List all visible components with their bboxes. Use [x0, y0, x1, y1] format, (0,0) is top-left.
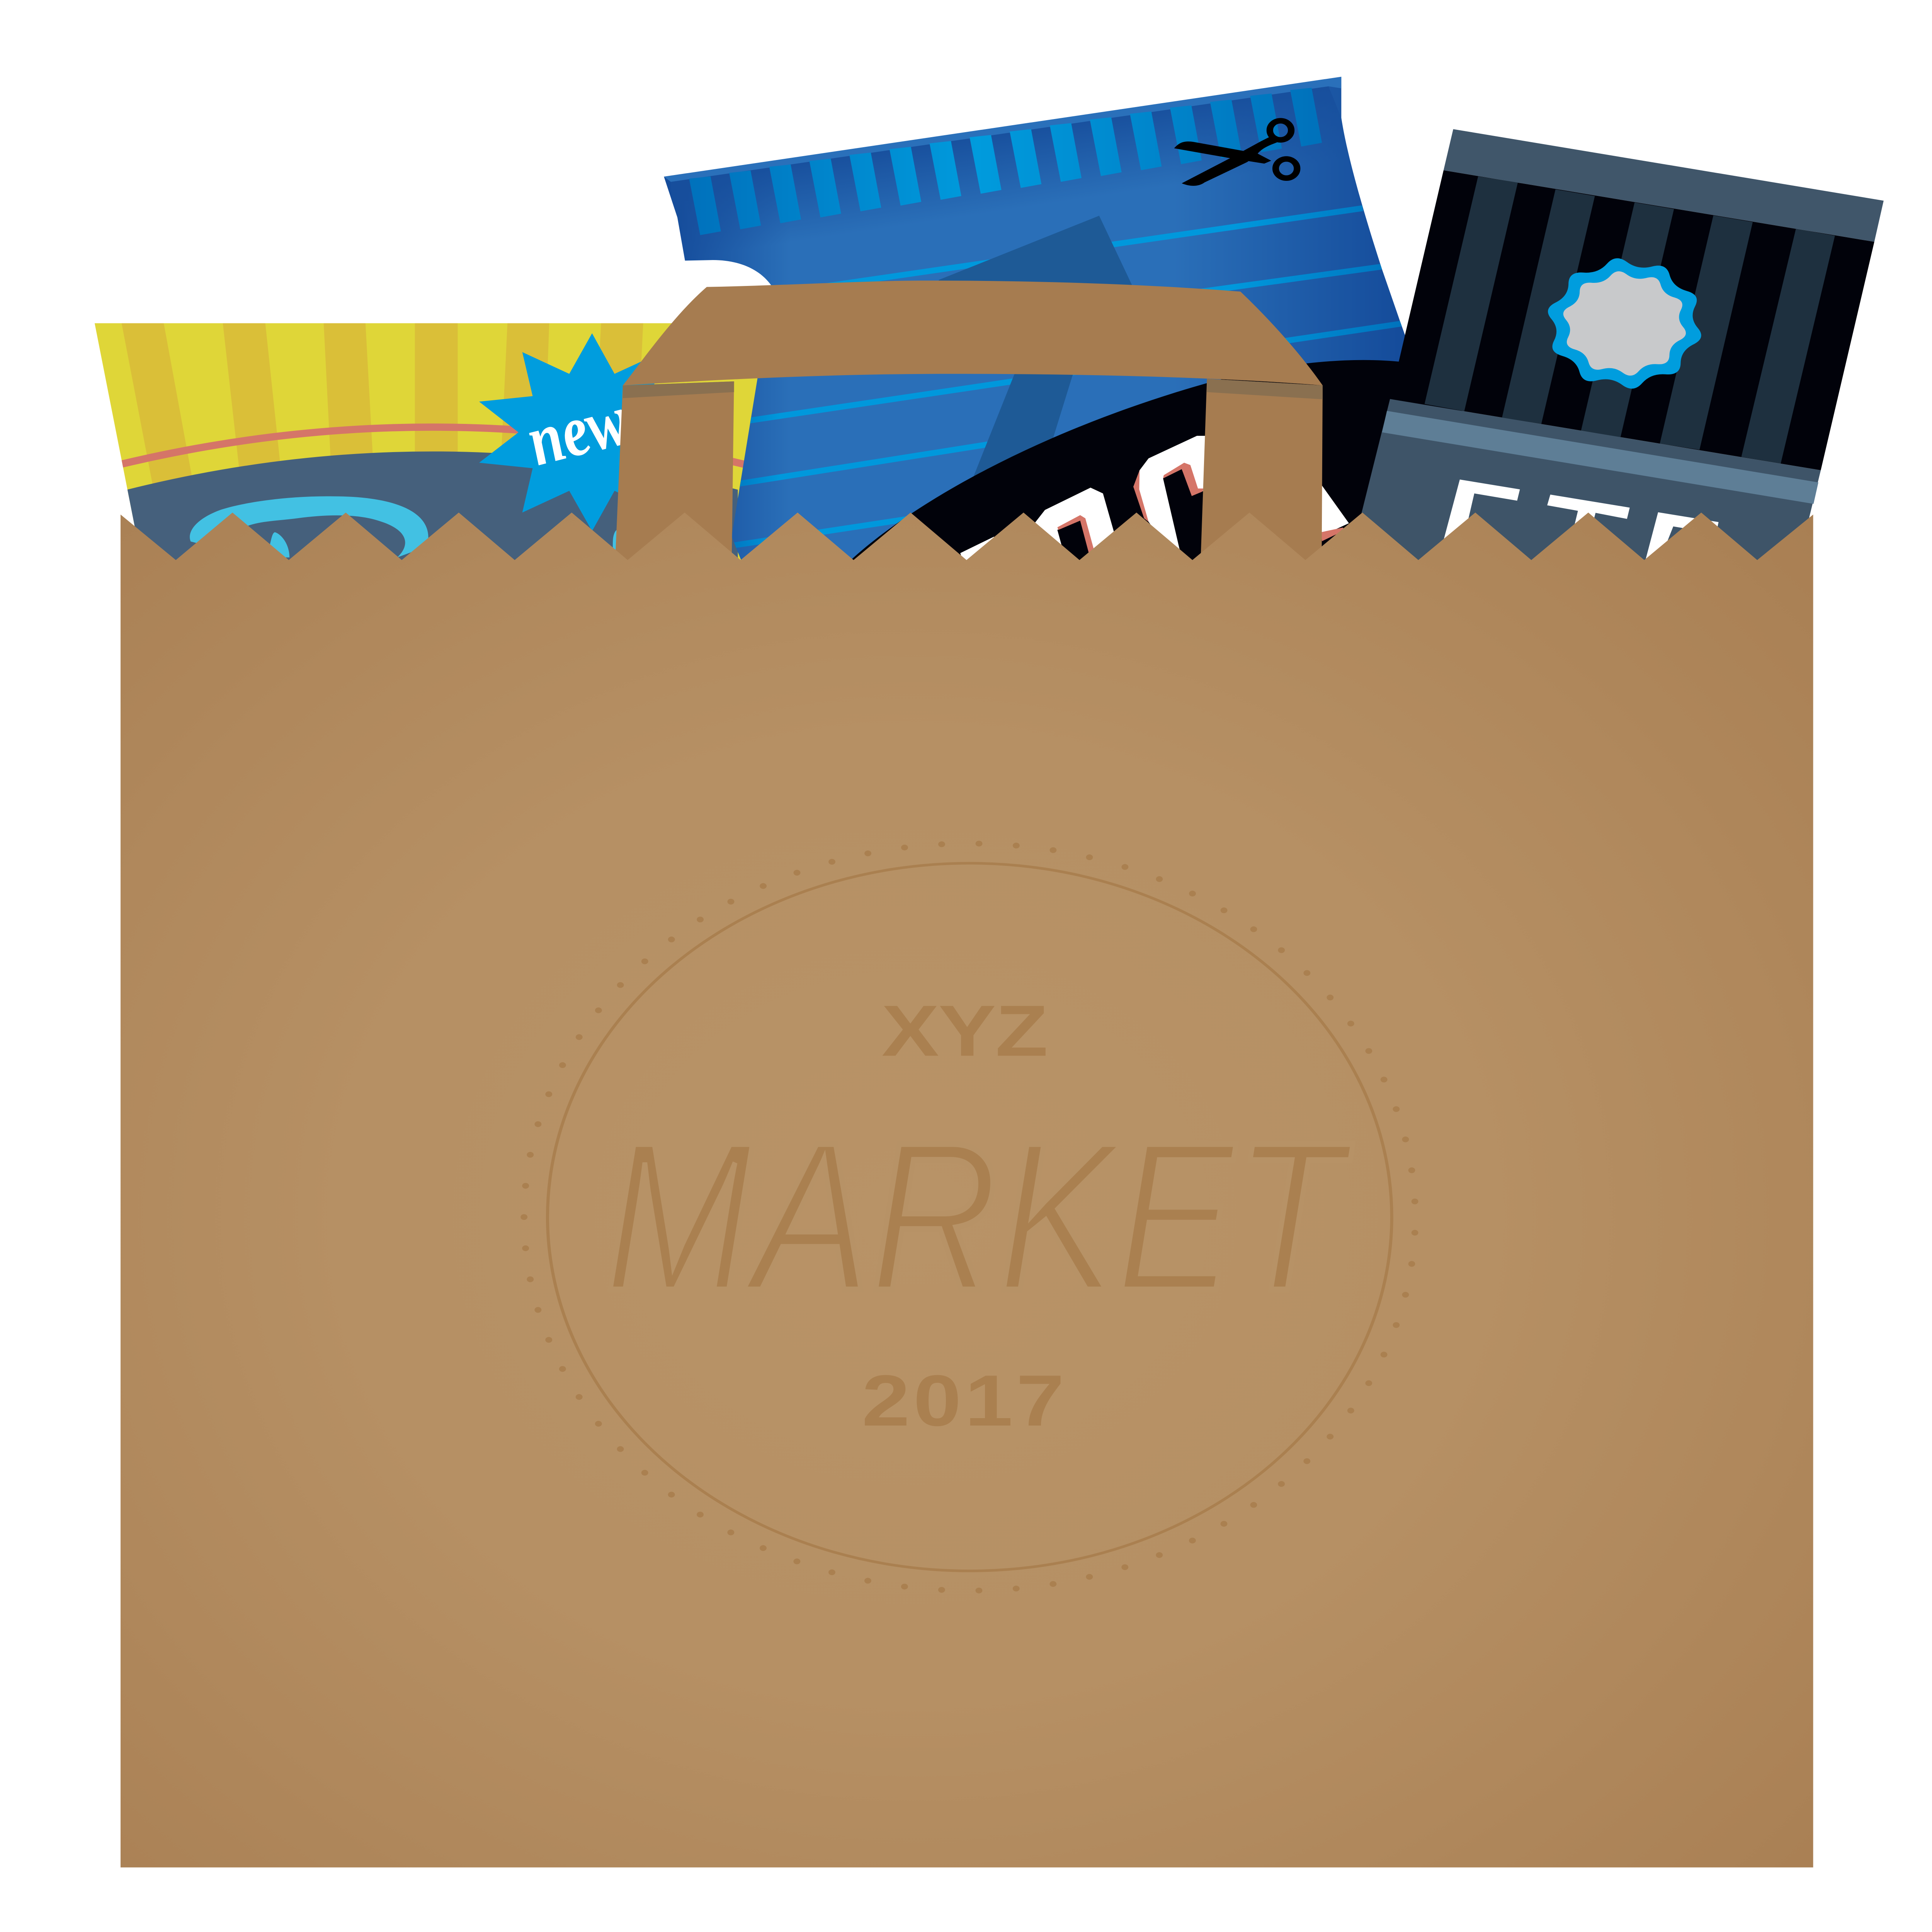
box lower label — [1347, 399, 1821, 570]
icon: scissors — [1174, 121, 1297, 186]
dark box package — [1347, 129, 1884, 570]
stamp XYZ: XYZ — [881, 990, 1048, 1071]
cyan drop right — [613, 530, 617, 550]
handle band — [623, 281, 1323, 385]
cyan drop — [270, 532, 290, 558]
slate dome on yellow package — [128, 451, 738, 560]
new starburst — [479, 333, 705, 531]
handle right strap — [1201, 379, 1323, 568]
box stripes — [1425, 176, 1835, 464]
box label letters — [1437, 480, 1719, 565]
new label: new — [515, 379, 639, 481]
stamp 2017: 2017 — [862, 1360, 1064, 1441]
dark fin — [939, 216, 1141, 492]
stamp dotted ring — [524, 844, 1415, 1590]
box body — [1390, 170, 1874, 470]
cyan swirl — [190, 496, 429, 558]
bag handle — [615, 281, 1323, 568]
blue package diagonal lines — [732, 208, 1403, 546]
strap shadow left — [623, 381, 734, 398]
handle left strap — [615, 381, 734, 568]
strap shadow right — [1207, 379, 1323, 399]
tear strip stripes — [689, 88, 1322, 235]
bag body — [121, 512, 1813, 1867]
icon: seal badge — [1548, 258, 1701, 389]
logo stamp — [524, 844, 1415, 1590]
yellow package — [95, 323, 757, 560]
pink arc on yellow package — [117, 427, 748, 465]
box label light band — [1382, 411, 1818, 504]
stamp circle — [548, 863, 1392, 1571]
stamp MARKET: MARKET — [605, 1098, 1353, 1334]
box top band — [1444, 129, 1884, 242]
blue package — [664, 77, 1468, 568]
paper bag — [121, 512, 1813, 1867]
black panel with lettering — [843, 360, 1468, 568]
